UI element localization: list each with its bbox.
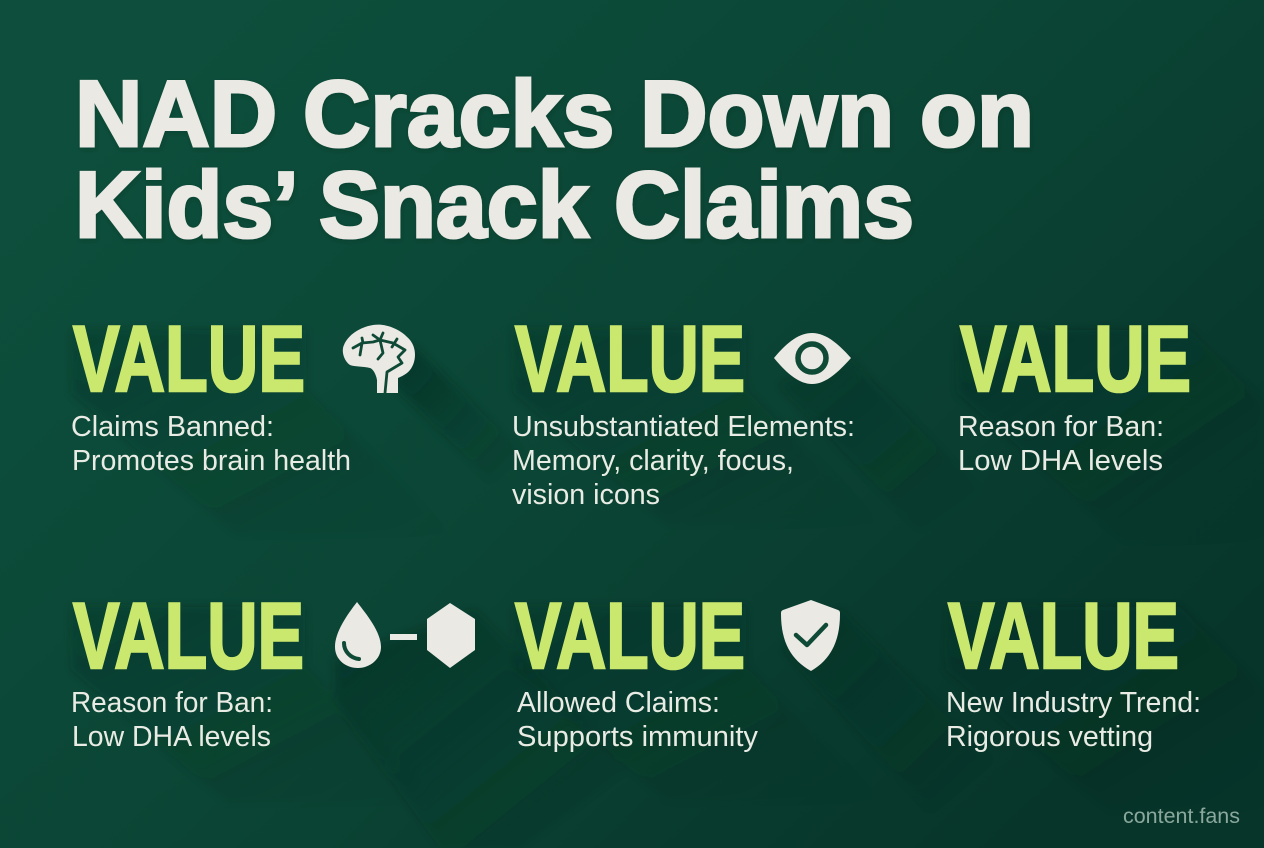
watermark: content.fans [1123, 805, 1240, 828]
description [946, 687, 1201, 753]
description: Supports immunity [517, 721, 758, 753]
stat: unsubstantiated elements [512, 306, 855, 511]
stat: claims banned [71, 306, 415, 477]
description: Unsubstantiated Elements: [512, 411, 855, 443]
description: Memory, clarity, focus, [512, 445, 794, 477]
description: Allowed Claims: [517, 687, 720, 719]
title: NAD Cracks Down on [75, 61, 1034, 166]
icon: brain [343, 325, 415, 393]
description: vision icons [512, 479, 660, 511]
stat: new industry trend [946, 583, 1201, 753]
value: VALUE [960, 306, 1191, 411]
description: Promotes brain health [72, 445, 351, 477]
description: Low DHA levels [72, 721, 271, 753]
description: New Industry Trend: [946, 687, 1201, 719]
description [71, 411, 351, 477]
icon: shield with check [781, 600, 840, 671]
value: VALUE [73, 306, 305, 411]
icon: eye [774, 333, 851, 384]
long shadows [72, 330, 1264, 848]
title: Kids’ Snack Claims [75, 152, 914, 257]
title [75, 61, 1034, 257]
description [71, 687, 273, 753]
stat: reason for ban, DHA [71, 583, 475, 753]
value: VALUE [515, 306, 745, 411]
stat: reason for ban [958, 306, 1191, 477]
icon: drop and hexagon [335, 602, 475, 668]
description [512, 411, 855, 511]
value: VALUE [515, 583, 745, 688]
description: Low DHA levels [958, 445, 1163, 477]
value: VALUE [73, 583, 304, 688]
description: Rigorous vetting [946, 721, 1153, 753]
description [958, 411, 1164, 477]
description [517, 687, 758, 753]
description: Reason for Ban: [71, 687, 273, 719]
description: Reason for Ban: [958, 411, 1164, 443]
value: VALUE [948, 583, 1179, 688]
stat: allowed claims [515, 583, 840, 753]
description: Claims Banned: [71, 411, 274, 443]
